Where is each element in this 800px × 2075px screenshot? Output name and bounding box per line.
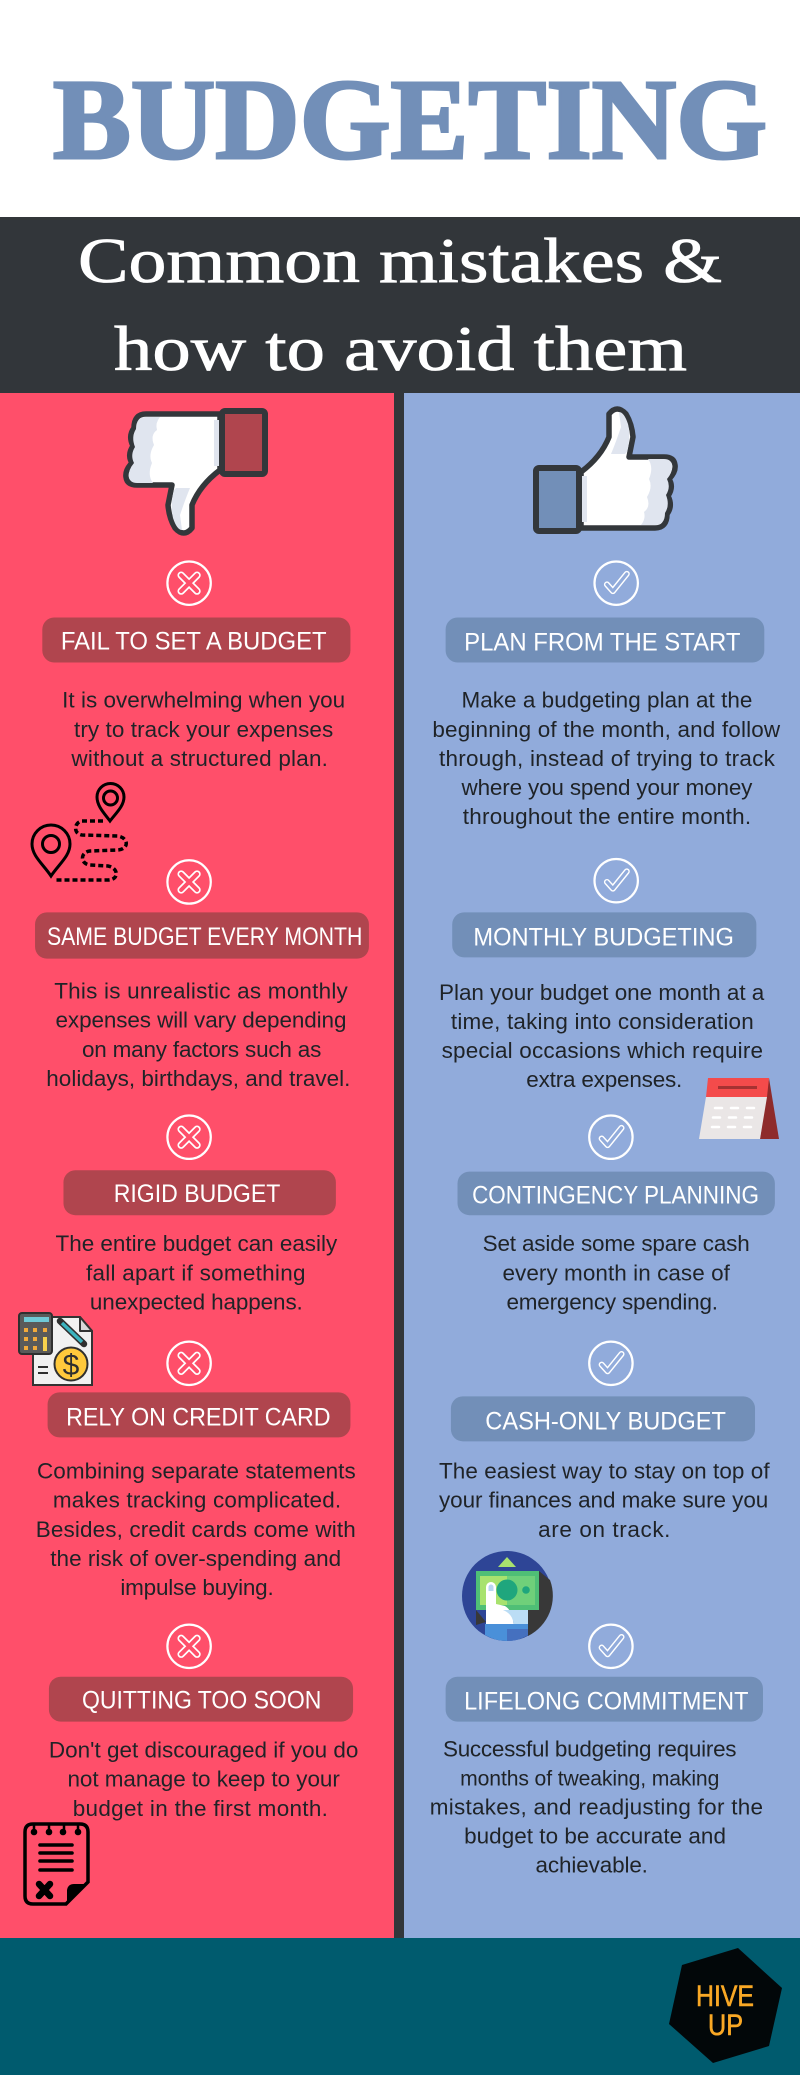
text block [56,1231,338,1314]
icon: check [595,561,638,605]
mistake 5 [49,1625,358,1821]
heading [42,618,350,662]
icon: thumbs up [536,409,675,531]
text block: This is unrealistic as monthly [54,979,349,1004]
column divider [394,393,404,1938]
mistake 4 [36,1342,356,1600]
text block: throughout the entire month. [463,804,751,829]
heading: RIGID BUDGET [114,1180,280,1208]
text block: through, instead of trying to track [439,746,776,771]
panel: solutions background [404,393,800,1938]
text block: budget in the first month. [73,1796,328,1821]
heading: PLAN FROM THE START [464,629,740,657]
heading: LIFELONG COMMITMENT [464,1688,748,1716]
text block: achievable. [536,1853,648,1878]
text block: The entire budget can easily [56,1231,338,1256]
text block: makes tracking complicated. [53,1488,341,1513]
text block: extra expenses. [526,1067,682,1092]
text block: expenses will vary depending [56,1008,346,1033]
solution 2 [439,859,765,1092]
text block [36,1459,356,1600]
icon: thumbs down [126,411,265,533]
footer band [0,1938,800,2075]
text block: your finances and make sure you [439,1488,768,1513]
icon: notepad [25,1824,88,1904]
icon: money hand [462,1551,553,1641]
title: BUDGETING [53,56,767,183]
icon: cross [167,1625,211,1668]
heading [451,1396,755,1441]
text block: on many factors such as [82,1037,321,1062]
heading: CASH-ONLY BUDGET [485,1407,726,1435]
icon: calendar [699,1078,779,1139]
heading [446,1677,763,1722]
logo: UP [708,2009,743,2042]
heading: MONTHLY BUDGETING [473,923,734,951]
subtitle band: Common mistakes & [78,225,722,296]
icon: check [589,1342,633,1385]
panel: mistakes content [35,561,369,1821]
text block: budget to be accurate and [464,1824,726,1849]
solution 5 [430,1625,763,1878]
icon: calculator and invoice: $ [63,1349,80,1382]
subtitle band [0,217,800,393]
text block: beginning of the month, and follow [432,717,781,742]
text block: Set aside some spare cash [483,1231,750,1256]
mistake 2 [35,860,369,1091]
text block: special occasions which require [442,1038,763,1063]
icon: map route [32,784,126,880]
heading: FAIL TO SET A BUDGET [61,627,327,655]
mistake 1 [42,561,350,771]
text block: every month in case of [502,1260,731,1285]
text block: Make a budgeting plan at the [461,688,752,713]
text block: time, taking into consideration [451,1009,754,1034]
panel: solutions content [430,561,781,1878]
heading [458,1172,775,1215]
mistake 3 [56,1116,338,1314]
heading [452,912,756,957]
text block: unexpected happens. [90,1289,303,1314]
text block: are on track. [538,1517,670,1542]
icon: cross [167,860,211,904]
text block [62,688,345,771]
icon: cross [167,1116,211,1159]
text block [49,1738,358,1821]
text block: mistakes, and readjusting for the [430,1794,763,1819]
heading [49,1677,353,1722]
solution 4 [439,1342,770,1542]
icon: check [589,1625,633,1668]
text block: without a structured plan. [70,746,328,771]
heading [35,912,369,959]
text block [46,979,350,1091]
text block [430,1736,763,1878]
text block: Don't get discouraged if you do [49,1738,358,1763]
text block: the risk of over-spending and [50,1546,341,1571]
text block: fall apart if something [86,1260,305,1285]
text block: Besides, credit cards come with [36,1517,356,1542]
text block: emergency spending. [506,1289,718,1314]
icon: check [589,1116,633,1159]
heading [63,1170,336,1215]
icon: check [595,859,638,902]
subtitle band: how to avoid them [114,313,687,384]
text block: Combining separate statements [37,1459,356,1484]
icon: calculator and invoice [19,1313,92,1385]
text block: not manage to keep to your [67,1767,340,1792]
panel: mistakes background [0,393,394,1938]
text block: where you spend your money [460,775,753,800]
text block: months of tweaking, making [460,1767,719,1790]
text block [439,1459,770,1542]
heading [446,618,764,662]
text block: impulse buying. [120,1575,274,1600]
heading: QUITTING TOO SOON [82,1686,321,1714]
logo: HIVE [696,1980,754,2013]
text block: Successful budgeting requires [443,1736,737,1761]
solution 3 [458,1116,775,1314]
text block: Plan your budget one month at a [439,980,765,1005]
text block: try to track your expenses [74,717,333,742]
text block: The easiest way to stay on top of [439,1459,770,1484]
text block [439,980,765,1092]
icon: cross [167,1342,211,1385]
text block [432,688,781,829]
heading: CONTINGENCY PLANNING [472,1181,759,1209]
icon: cross [167,561,211,605]
heading [48,1392,350,1437]
logo [669,1948,782,2063]
text block [483,1231,750,1314]
heading: SAME BUDGET EVERY MONTH [47,923,362,951]
text block: It is overwhelming when you [62,688,345,713]
heading: RELY ON CREDIT CARD [66,1403,331,1431]
text block: holidays, birthdays, and travel. [46,1066,350,1091]
solution 1 [432,561,781,829]
